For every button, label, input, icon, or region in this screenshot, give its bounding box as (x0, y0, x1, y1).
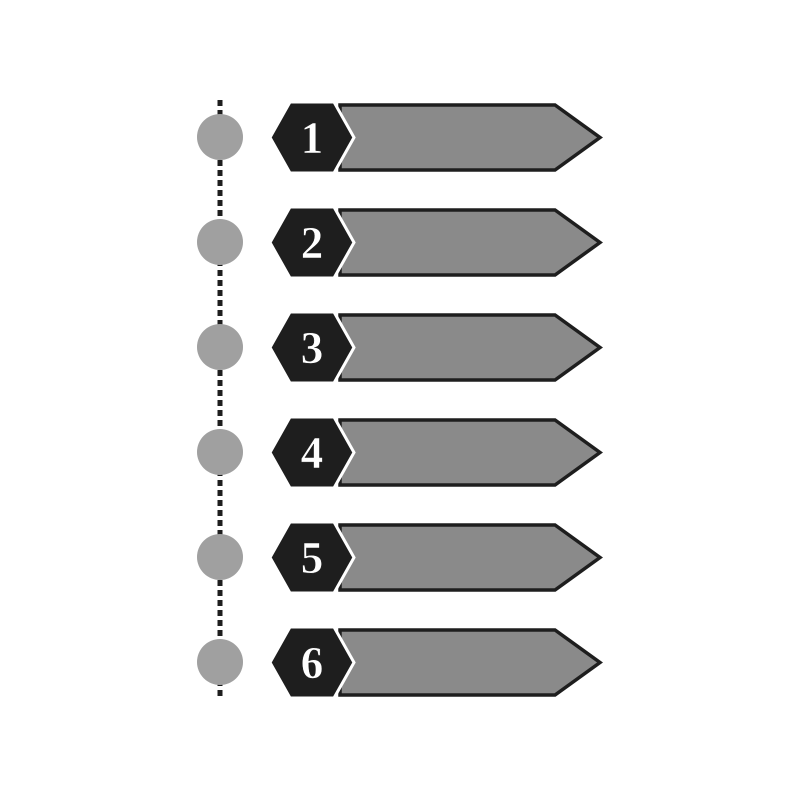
step 4 (197, 417, 600, 488)
step 2 (197, 207, 600, 278)
step 1 (197, 102, 600, 173)
step 4: 4 (301, 428, 323, 478)
step 6 (197, 627, 600, 698)
step 6: 6 (301, 638, 323, 688)
dashed timeline (218, 100, 222, 700)
step 2: 2 (301, 218, 323, 268)
step 1: 1 (301, 113, 323, 163)
step 5 (197, 522, 600, 593)
step 5: 5 (301, 533, 323, 583)
step 3 (197, 312, 600, 383)
step 3: 3 (301, 323, 323, 373)
